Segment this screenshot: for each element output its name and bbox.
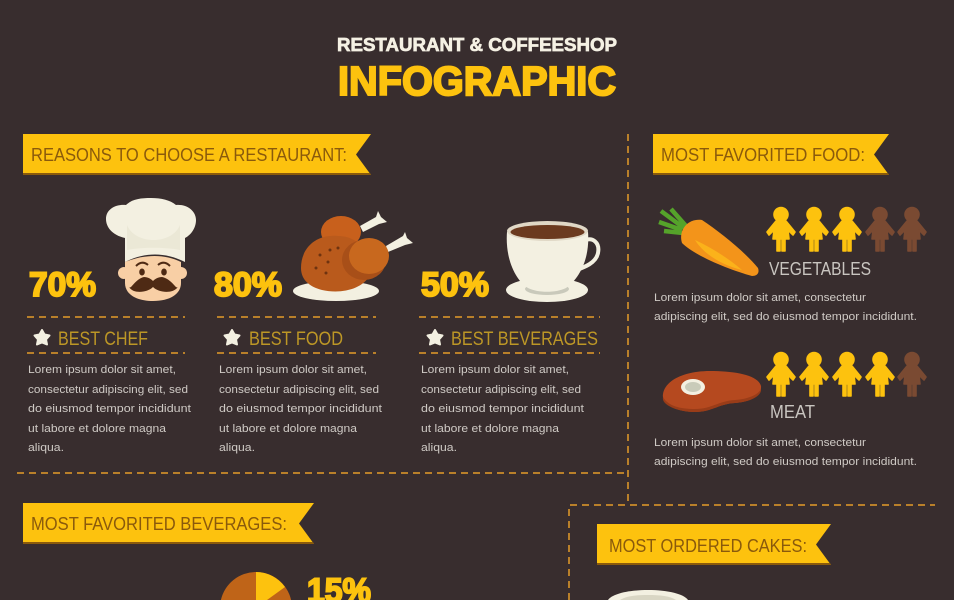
banner: most ordered cakes: MOST ORDERED CAKES: [609,536,807,556]
icon: steak [663,371,761,412]
label: best chef: BEST CHEF [58,329,148,350]
percentage 50: 50% [421,266,489,304]
text block [219,364,382,454]
text block: aliqua. [421,442,457,454]
banner: most ordered cakes [597,524,831,565]
banner: reasons to choose a restaurant: REASONS TO CHOOSE A RESTAURANT: [31,145,347,165]
text block: consectetur adipiscing elit, sed [28,384,188,396]
text block: Lorem ipsum dolor sit amet, [421,364,569,376]
panel: food [214,211,413,454]
text block: ut labore et dolore magna [28,423,167,435]
text block: ut labore et dolore magna [421,423,560,435]
panel: beverages reason [419,221,600,454]
text block [28,364,191,454]
banner: most favorited food [653,134,889,175]
banner: reasons to choose a restaurant [23,134,371,175]
pictogram: 3 of 5 people [767,208,926,251]
text block: Lorem ipsum dolor sit amet, [28,364,176,376]
text block: consectetur adipiscing elit, sed [219,384,379,396]
icon: cake [608,590,688,600]
banner: most favorited beverages [23,503,314,544]
text block: adipiscing elit, sed do eiusmod tempor incididunt. [654,456,917,468]
text block: Lorem ipsum dolor sit amet, consectetur [654,437,866,449]
text block: Lorem ipsum dolor sit amet, consectetur [654,292,866,304]
panel: meat [654,352,926,468]
icon: coffee cup [506,221,598,302]
panel: chef [27,198,196,454]
icon: chef [106,198,196,301]
title: INFOGRAPHIC [338,58,616,104]
label: best food: BEST FOOD [249,329,343,350]
text block: adipiscing elit, sed do eiusmod tempor incididunt. [654,311,917,323]
pictogram: 4 of 5 people [767,352,926,396]
label: vegetables: VEGETABLES [769,259,871,279]
text block [654,292,917,323]
title: RESTAURANT & COFFEESHOP [337,35,617,55]
percentage 70: 70% [29,266,96,304]
label: best beverages: BEST BEVERAGES [451,329,598,350]
text block: do eiusmod tempor incididunt [28,403,191,415]
icon: carrot [659,209,759,276]
text block: ut labore et dolore magna [219,423,358,435]
banner: most favorited beverages: MOST FAVORITED BEVERAGES: [31,514,287,534]
title [337,35,617,104]
text block: aliqua. [28,442,64,454]
banner: most favorited food: MOST FAVORITED FOOD: [661,145,865,165]
icon: star [428,330,442,344]
icon: star [34,330,50,344]
text block: do eiusmod tempor incididunt [421,403,584,415]
icon: star [224,330,240,344]
icon: chicken [293,211,413,301]
label: meat: MEAT [770,402,815,422]
text block [654,437,917,468]
text block: aliqua. [219,442,255,454]
text block: consectetur adipiscing elit, sed [421,384,581,396]
text block [421,364,584,454]
text block: do eiusmod tempor incididunt [219,403,382,415]
pie chart [221,572,291,600]
percentage 80: 80% [214,266,282,304]
panel: vegetables [654,208,926,323]
text block: Lorem ipsum dolor sit amet, [219,364,367,376]
